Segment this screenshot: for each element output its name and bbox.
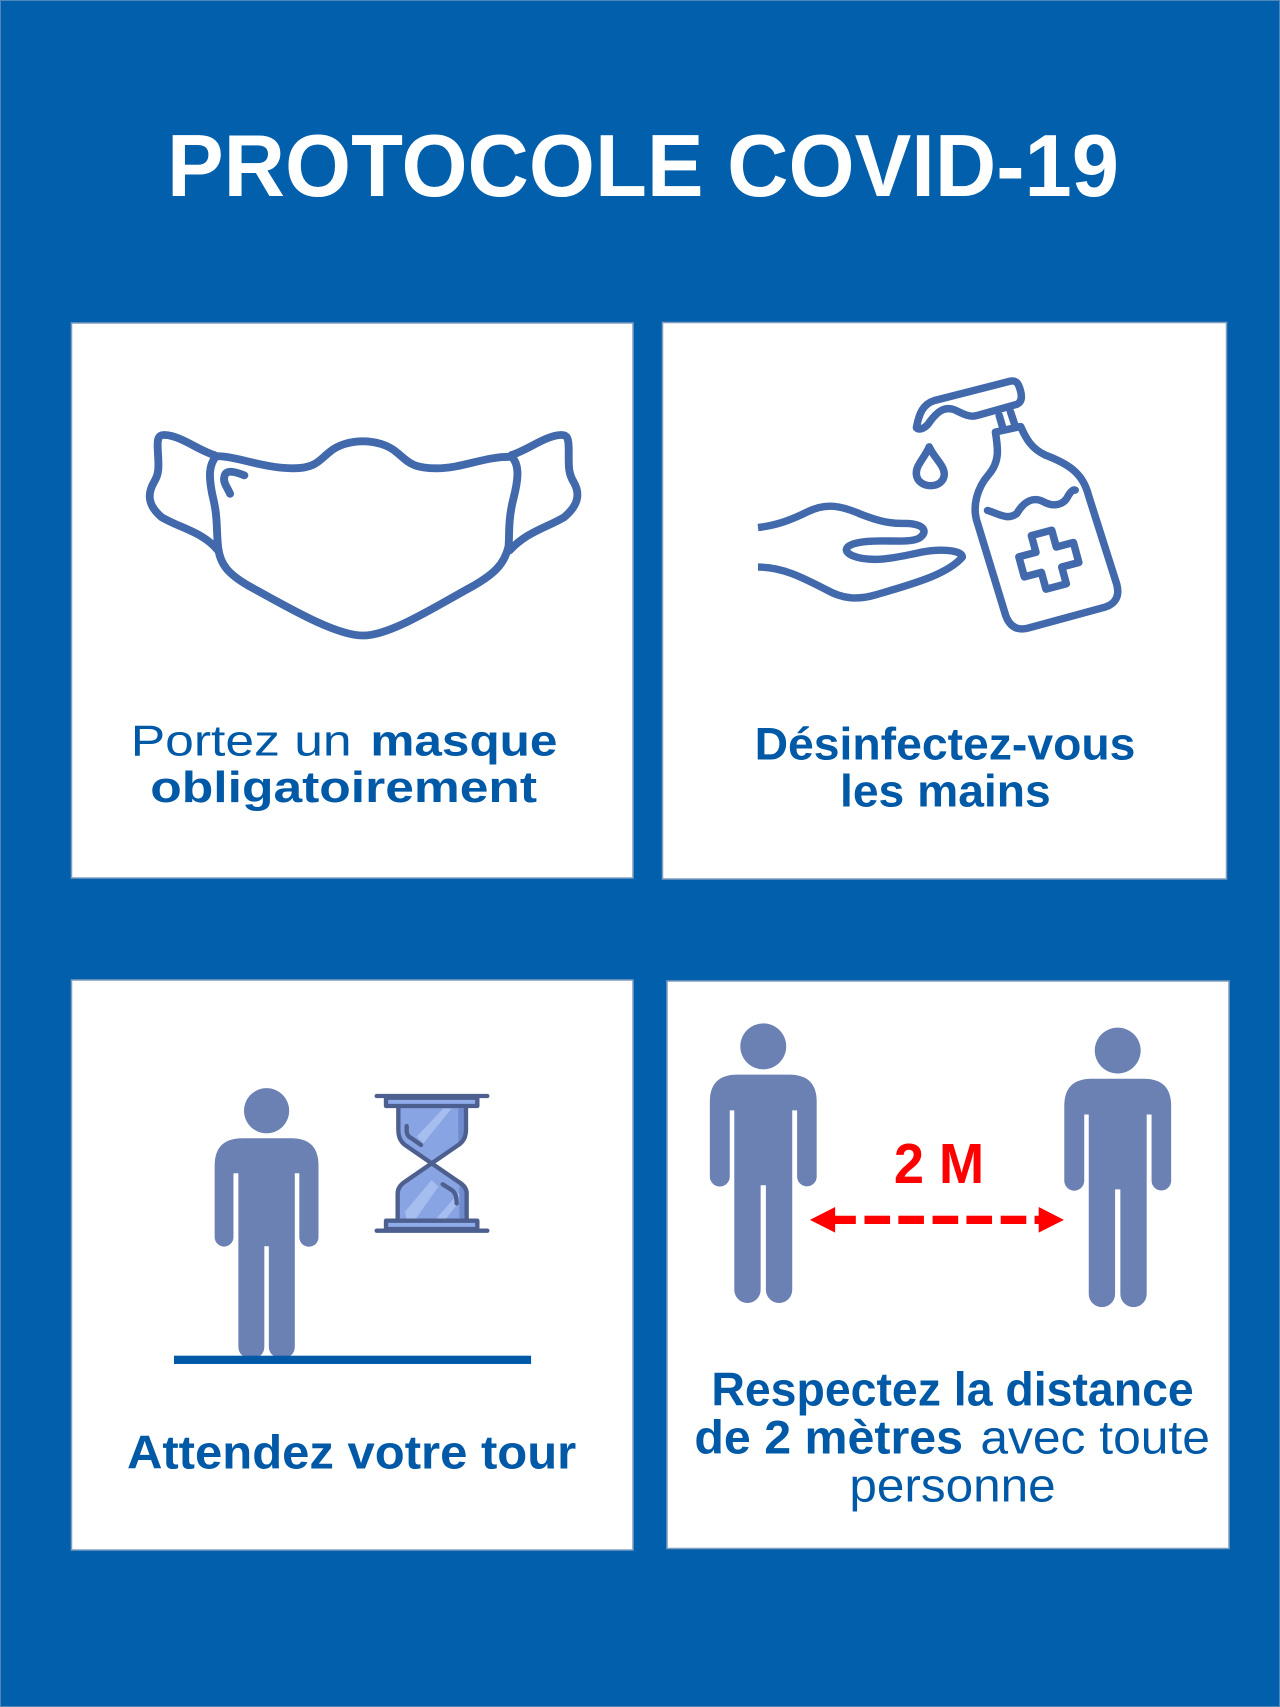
caption: mains: les mains	[840, 766, 1051, 816]
caption: mains	[755, 719, 1135, 816]
panel: mains	[662, 322, 1226, 879]
panel: distance	[667, 981, 1229, 1548]
label: 2 M: 2 M	[894, 1132, 984, 1195]
icon: standing person	[215, 1088, 319, 1358]
icon: left person	[710, 1023, 817, 1303]
caption: distance: personne	[849, 1458, 1056, 1511]
arrow: double-headed dashed	[810, 1207, 1064, 1233]
caption: masque: obligatoirement	[150, 763, 537, 812]
caption: mains: Désinfectez-vous	[755, 719, 1135, 769]
panel: masque	[72, 323, 633, 878]
caption: distance: de 2 mètres	[694, 1411, 963, 1464]
caption: distance: Respectez la distance	[711, 1362, 1194, 1415]
title: PROTOCOLE COVID-19	[167, 116, 1119, 215]
icon: face mask	[150, 435, 577, 636]
caption: distance	[694, 1362, 1210, 1511]
floor line	[174, 1356, 531, 1364]
caption: masque: masque	[370, 717, 557, 766]
icon: hourglass	[377, 1096, 487, 1231]
caption: masque	[131, 717, 557, 812]
caption: distance: avec toute	[980, 1411, 1210, 1464]
icon: right person	[1064, 1028, 1171, 1307]
icon: hand and sanitizer bottle	[758, 381, 1118, 629]
caption: masque: Portez un	[131, 717, 352, 766]
caption: attendre: Attendez votre tour	[127, 1426, 576, 1479]
panel: attendre	[72, 980, 633, 1550]
